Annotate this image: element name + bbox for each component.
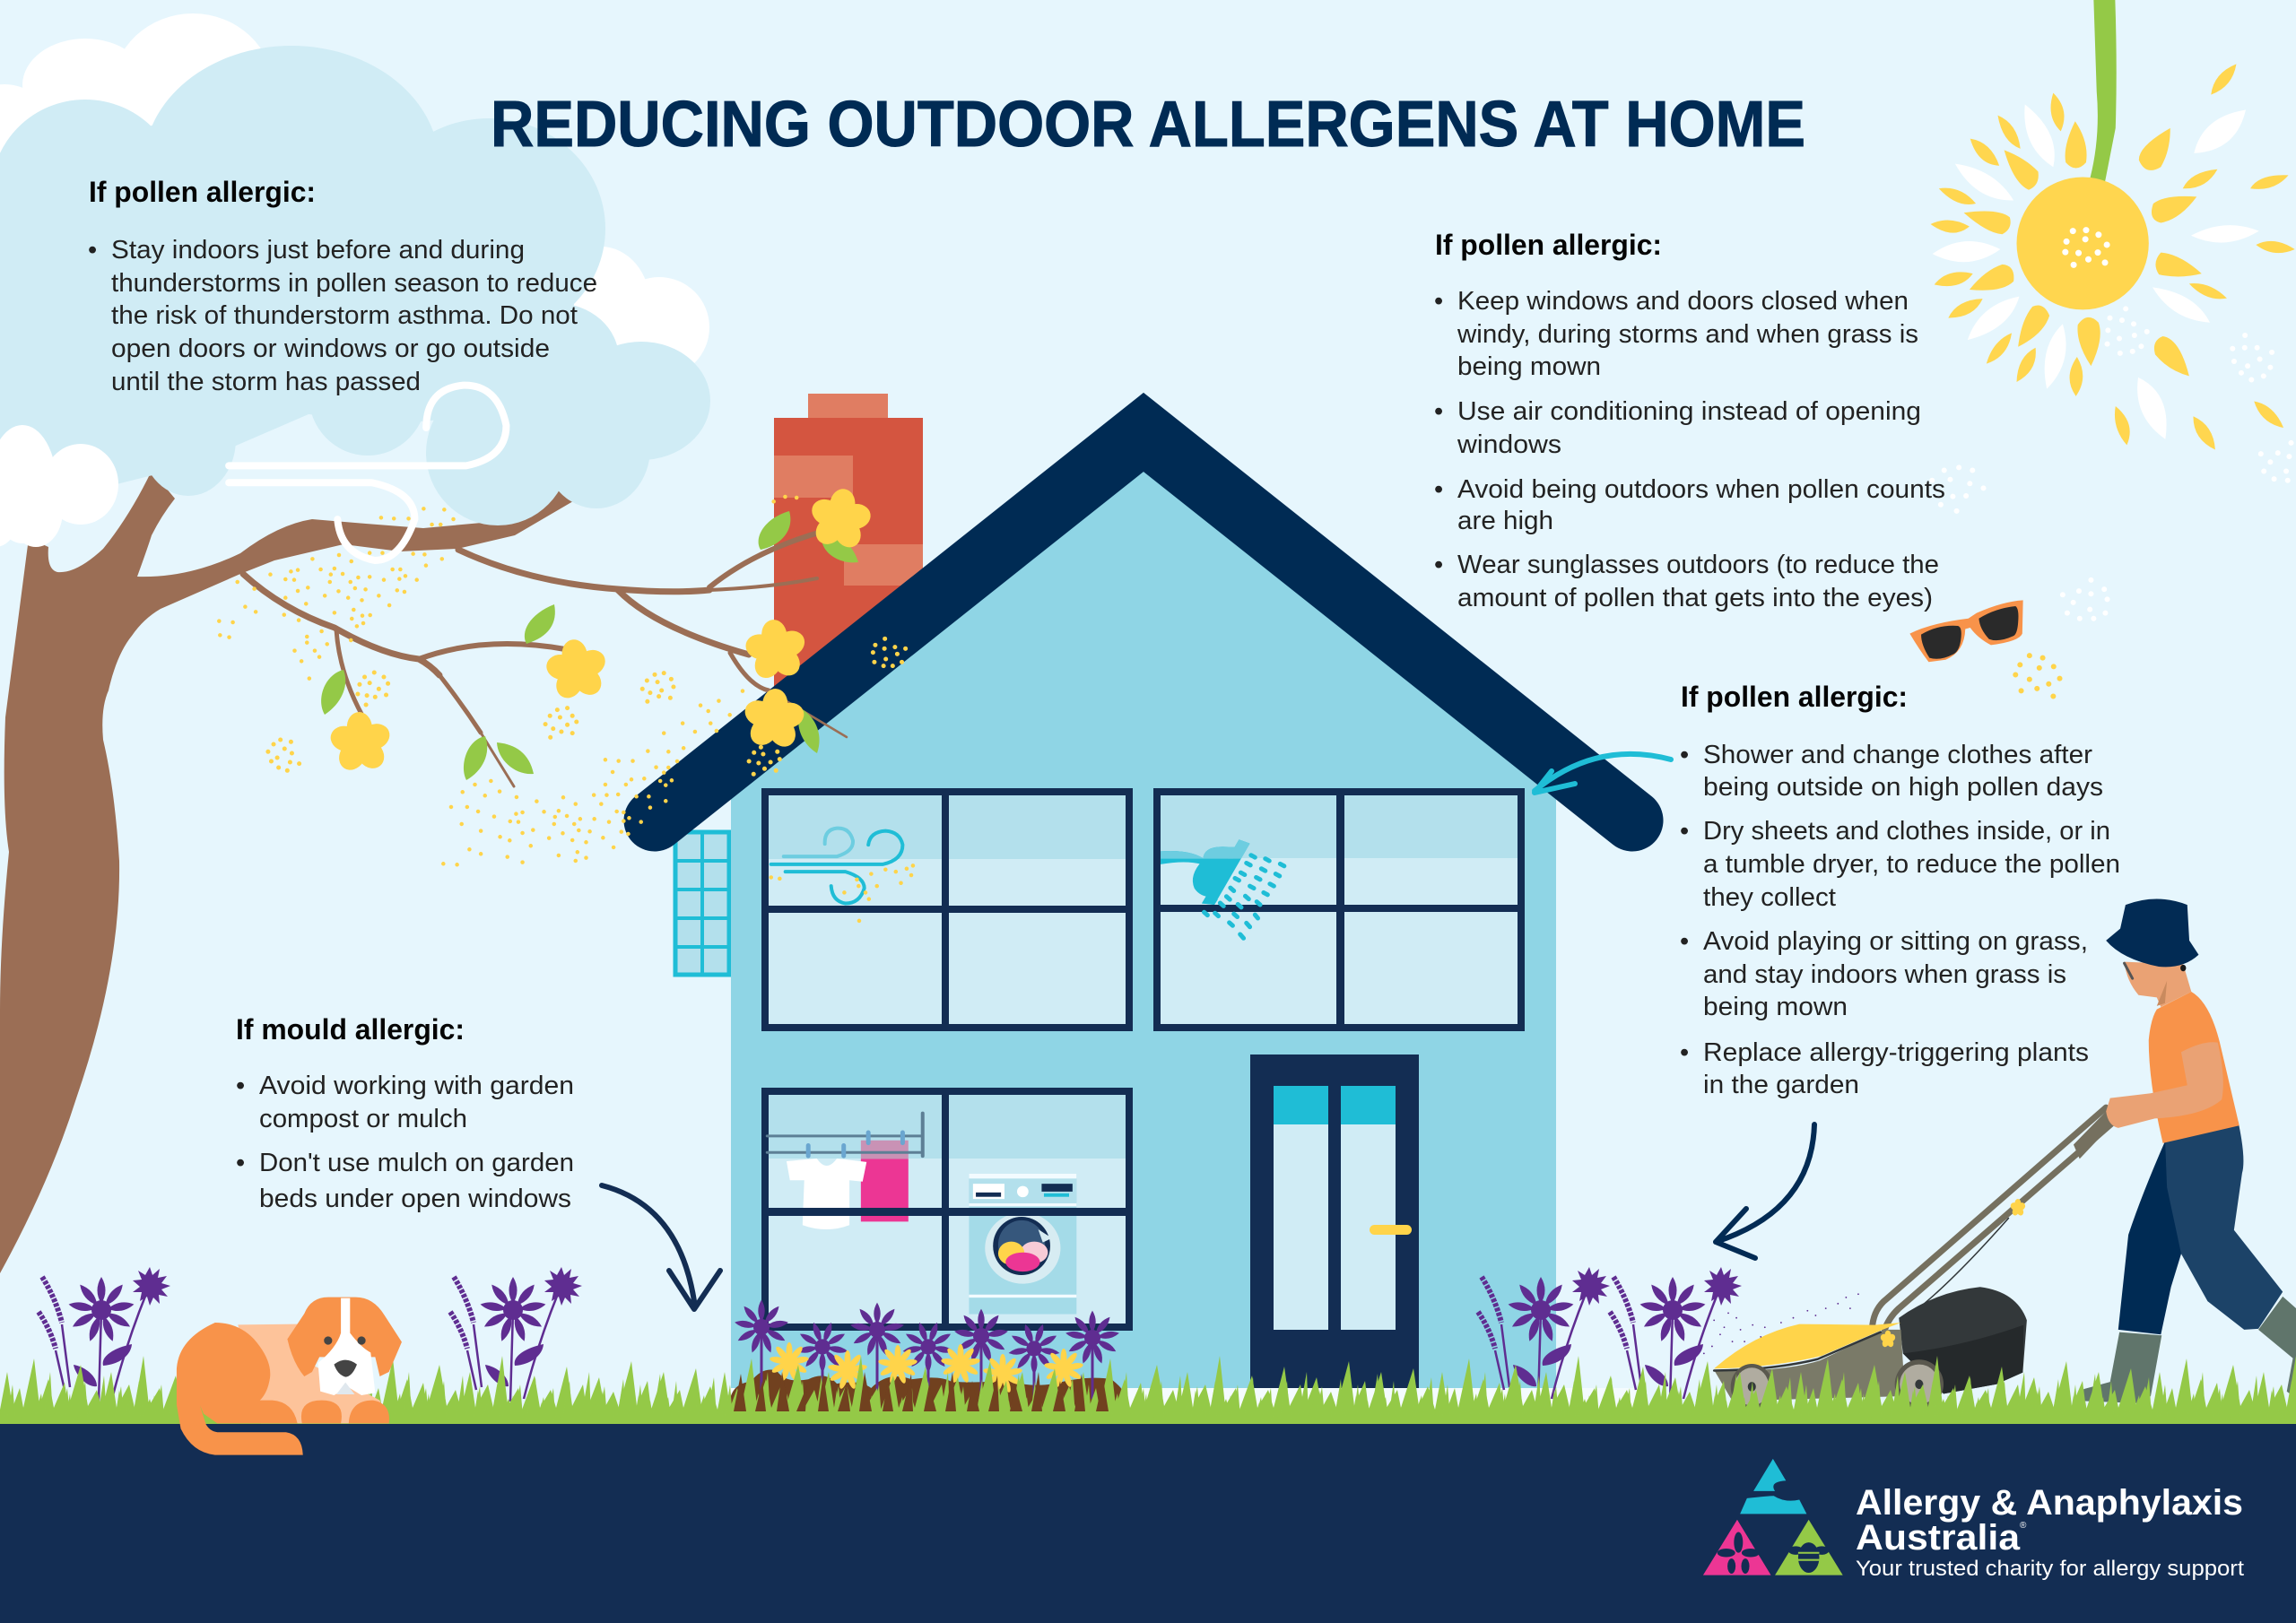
text: windows and sunglasses advice: • [1434, 397, 1443, 426]
tree trunk and main limb [0, 471, 573, 1273]
text: windows and sunglasses advice: Keep windows and doors closed when [1457, 287, 1909, 316]
rump and tail [177, 1323, 303, 1455]
text: thunderstorm advice: Stay indoors just before and during [111, 236, 525, 265]
text: clothes and garden advice: and stay indoors when grass is [1703, 960, 2066, 989]
lower window [761, 1088, 1133, 1331]
upper left window [761, 788, 1133, 1031]
text: clothes and garden advice: • [1680, 741, 1689, 769]
flower centre [2017, 177, 2149, 309]
roof [655, 432, 1632, 820]
text: windows and sunglasses advice: being mown [1457, 352, 1601, 381]
icon: shower [1161, 839, 1284, 938]
text: windows and sunglasses advice: windows [1457, 430, 1561, 459]
hat [2106, 898, 2198, 967]
garden plants [39, 1267, 1742, 1402]
stems [761, 1327, 1092, 1399]
deck [1714, 1330, 1905, 1401]
tree foliage cloud [0, 46, 710, 525]
wheels [1731, 1364, 1773, 1410]
clippings [1704, 1294, 1858, 1353]
text: mould advice: Don't use mulch on garden [259, 1149, 574, 1177]
text: clothes and garden advice: Dry sheets and clothes inside, or in [1703, 817, 2110, 846]
purple flowers [734, 1300, 1120, 1382]
text: clothes and garden advice: a tumble dryer, to reduce the pollen [1703, 850, 2120, 879]
washing machine [969, 1174, 1076, 1315]
logo: ® [2020, 1521, 2027, 1531]
text: clothes and garden advice: • [1680, 927, 1689, 956]
logo mark [1703, 1459, 1843, 1575]
yellow daisies [770, 1342, 1083, 1393]
laundry rack and clothes [767, 1114, 923, 1229]
yellow petals [1931, 64, 2295, 450]
white cloud lower left [0, 425, 118, 547]
arm [2106, 1042, 2223, 1128]
ground strip [729, 1388, 1644, 1415]
text: thunderstorm advice: If pollen allergic: [89, 176, 316, 208]
sun flower [1931, 0, 2295, 619]
text: mould advice: compost or mulch [259, 1105, 467, 1133]
face [2125, 962, 2191, 1007]
handle [1873, 1107, 2106, 1325]
text: clothes and garden advice: • [1680, 817, 1689, 846]
text: mould advice: beds under open windows [259, 1185, 571, 1213]
text: windows and sunglasses advice: • [1434, 551, 1443, 579]
white pollen dots [1932, 308, 2292, 619]
text: mould advice: Avoid working with garden [259, 1072, 574, 1100]
text: clothes and garden advice: being outside on high pollen days [1703, 773, 2103, 802]
knobs [1880, 1331, 1896, 1349]
arrow: to roof [1535, 754, 1671, 793]
white wind lines [229, 386, 506, 560]
person mowing [2082, 898, 2296, 1403]
text: clothes and garden advice: • [1680, 1038, 1689, 1067]
white petals [1933, 104, 2259, 439]
head and ears [287, 1298, 402, 1376]
house wall [731, 448, 1556, 1388]
flower bed [729, 1300, 1128, 1410]
text: windows and sunglasses advice: Wear sunglasses outdoors (to reduce the [1457, 551, 1939, 579]
upper right window [1153, 788, 1525, 1031]
white clouds behind [0, 13, 709, 378]
title: REDUCING OUTDOOR ALLERGENS AT HOME [491, 89, 1805, 161]
text: windows and sunglasses advice: If pollen allergic: [1435, 229, 1662, 261]
text: windows and sunglasses advice: Avoid being outdoors when pollen counts [1457, 475, 1945, 504]
lawn mower [1704, 1107, 2113, 1410]
text: windows and sunglasses advice: • [1434, 475, 1443, 504]
text: windows and sunglasses advice: amount of pollen that gets into the eyes) [1457, 584, 1933, 612]
icon: sunglasses [1909, 600, 2060, 697]
boots [2082, 1332, 2161, 1403]
grass [0, 1345, 2296, 1424]
text: thunderstorm advice: the risk of thunderstorm asthma. Do not [111, 301, 578, 330]
text: clothes and garden advice: they collect [1703, 883, 1836, 912]
green stem [2091, 0, 2117, 182]
tree branches [243, 532, 847, 786]
text: clothes and garden advice: Shower and change clothes after [1703, 741, 2092, 769]
text: clothes and garden advice: being mown [1703, 993, 1848, 1021]
text: windows and sunglasses advice [1434, 229, 1945, 612]
mulch blades [734, 1372, 1109, 1411]
text: clothes and garden advice: in the garden [1703, 1071, 1859, 1099]
tagline: Your trusted charity for allergy support [1856, 1557, 2244, 1581]
dog [177, 1298, 402, 1455]
shirt [2149, 992, 2239, 1143]
text: windows and sunglasses advice: • [1434, 287, 1443, 316]
door [1250, 1055, 1419, 1388]
lower window horizontal bar over clothes [769, 1208, 1126, 1216]
body [238, 1324, 389, 1423]
text: clothes and garden advice: If pollen allergic: [1681, 681, 1908, 713]
text: windows and sunglasses advice: windy, during storms and when grass is [1457, 320, 1918, 349]
text: clothes and garden advice: Replace allergy-triggering plants [1703, 1038, 2089, 1067]
text: clothes and garden advice: Avoid playing or sitting on grass, [1703, 927, 2088, 956]
icon: wind with pollen [771, 829, 913, 921]
text: mould advice: • [236, 1072, 245, 1100]
text: thunderstorm advice: until the storm has passed [111, 368, 421, 396]
text: thunderstorm advice: open doors or windows or go outside [111, 334, 550, 363]
yellow flowers [326, 484, 877, 777]
text: windows and sunglasses advice: Use air conditioning instead of opening [1457, 397, 1921, 426]
small side window [675, 832, 729, 975]
trousers [2118, 1135, 2181, 1334]
arrow: to garden plants [1716, 1124, 1814, 1258]
catcher [1899, 1287, 2027, 1393]
text: mould advice [236, 1013, 574, 1213]
chimney [774, 394, 923, 687]
text: thunderstorm advice: • [88, 236, 97, 265]
logo text: Allergy & Anaphylaxis [1856, 1483, 2243, 1523]
arrow: to garden bed [602, 1185, 720, 1309]
text: mould advice: • [236, 1149, 245, 1177]
paws [301, 1401, 342, 1423]
white blaze [318, 1298, 375, 1395]
house [655, 432, 1644, 1415]
pollen dots [219, 497, 906, 864]
text: thunderstorm advice [88, 176, 597, 396]
text: mould advice: If mould allergic: [236, 1013, 465, 1046]
text: windows and sunglasses advice: are high [1457, 507, 1553, 535]
text: thunderstorm advice: thunderstorms in pollen season to reduce [111, 269, 597, 298]
mulch [729, 1370, 1128, 1410]
footer band [0, 1424, 2296, 1623]
logo: Australia [1856, 1518, 2021, 1558]
logo [1703, 1459, 2244, 1581]
leaves [321, 511, 858, 780]
text: clothes and garden advice [1680, 681, 2120, 1099]
eyes and nose [324, 1336, 332, 1345]
